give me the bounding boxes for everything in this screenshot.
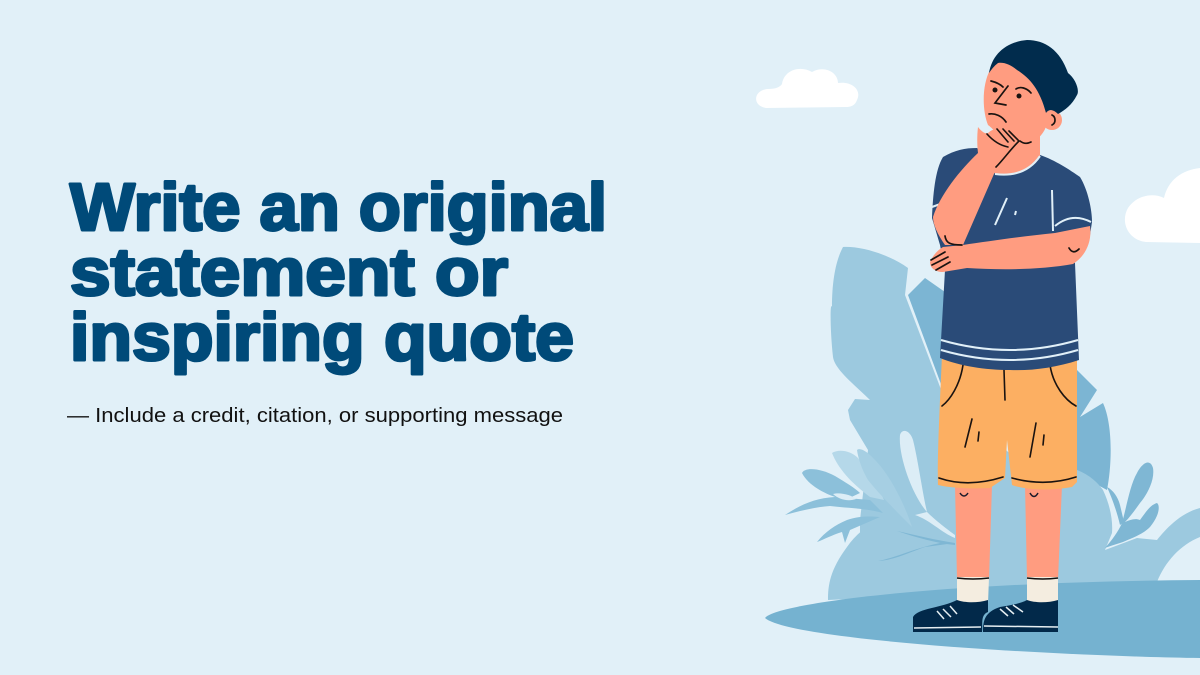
dark back leaves	[908, 278, 1111, 490]
shirt stripes	[941, 340, 1078, 360]
ground shadow	[765, 580, 1200, 658]
knees	[960, 493, 1038, 496]
raised arm	[933, 127, 1020, 245]
right fronds	[1105, 463, 1159, 548]
arm lines	[931, 236, 1079, 270]
large light leaf	[831, 247, 1030, 590]
frond: medium	[857, 449, 912, 527]
title	[70, 170, 607, 375]
title: inspiring quote	[70, 300, 574, 375]
eyes	[992, 88, 998, 92]
frond hole	[833, 493, 856, 500]
socks	[957, 577, 1058, 604]
icon: small cloud	[756, 69, 858, 108]
leaf slit	[900, 431, 927, 512]
frond: pale	[832, 451, 884, 500]
frond: middle left	[785, 497, 883, 515]
legs	[955, 485, 1062, 580]
right frond stem	[1107, 487, 1124, 525]
shoes	[913, 600, 988, 632]
credit line: — Include a credit, citation, or supporting message	[67, 404, 563, 427]
icon: large cloud	[1125, 168, 1200, 243]
folded arm	[930, 226, 1090, 272]
shirt	[932, 148, 1092, 370]
frond: upper left	[802, 469, 860, 500]
title: statement or	[70, 235, 508, 310]
shoe details	[914, 605, 1058, 628]
bush veins	[878, 531, 955, 561]
hand lines	[987, 129, 1031, 167]
lower bush	[828, 470, 1200, 600]
neck	[990, 130, 1040, 174]
hair	[989, 40, 1078, 114]
foliage	[785, 247, 1200, 600]
title: Write an original	[70, 170, 607, 245]
frond: lower left	[817, 516, 880, 543]
head	[984, 58, 1048, 146]
shorts lines	[939, 365, 1076, 483]
face lines	[989, 81, 1055, 125]
shorts	[938, 355, 1077, 489]
person	[913, 40, 1092, 632]
ear	[1042, 110, 1062, 130]
pale stripe	[915, 512, 955, 538]
shirt highlights	[932, 156, 1091, 231]
